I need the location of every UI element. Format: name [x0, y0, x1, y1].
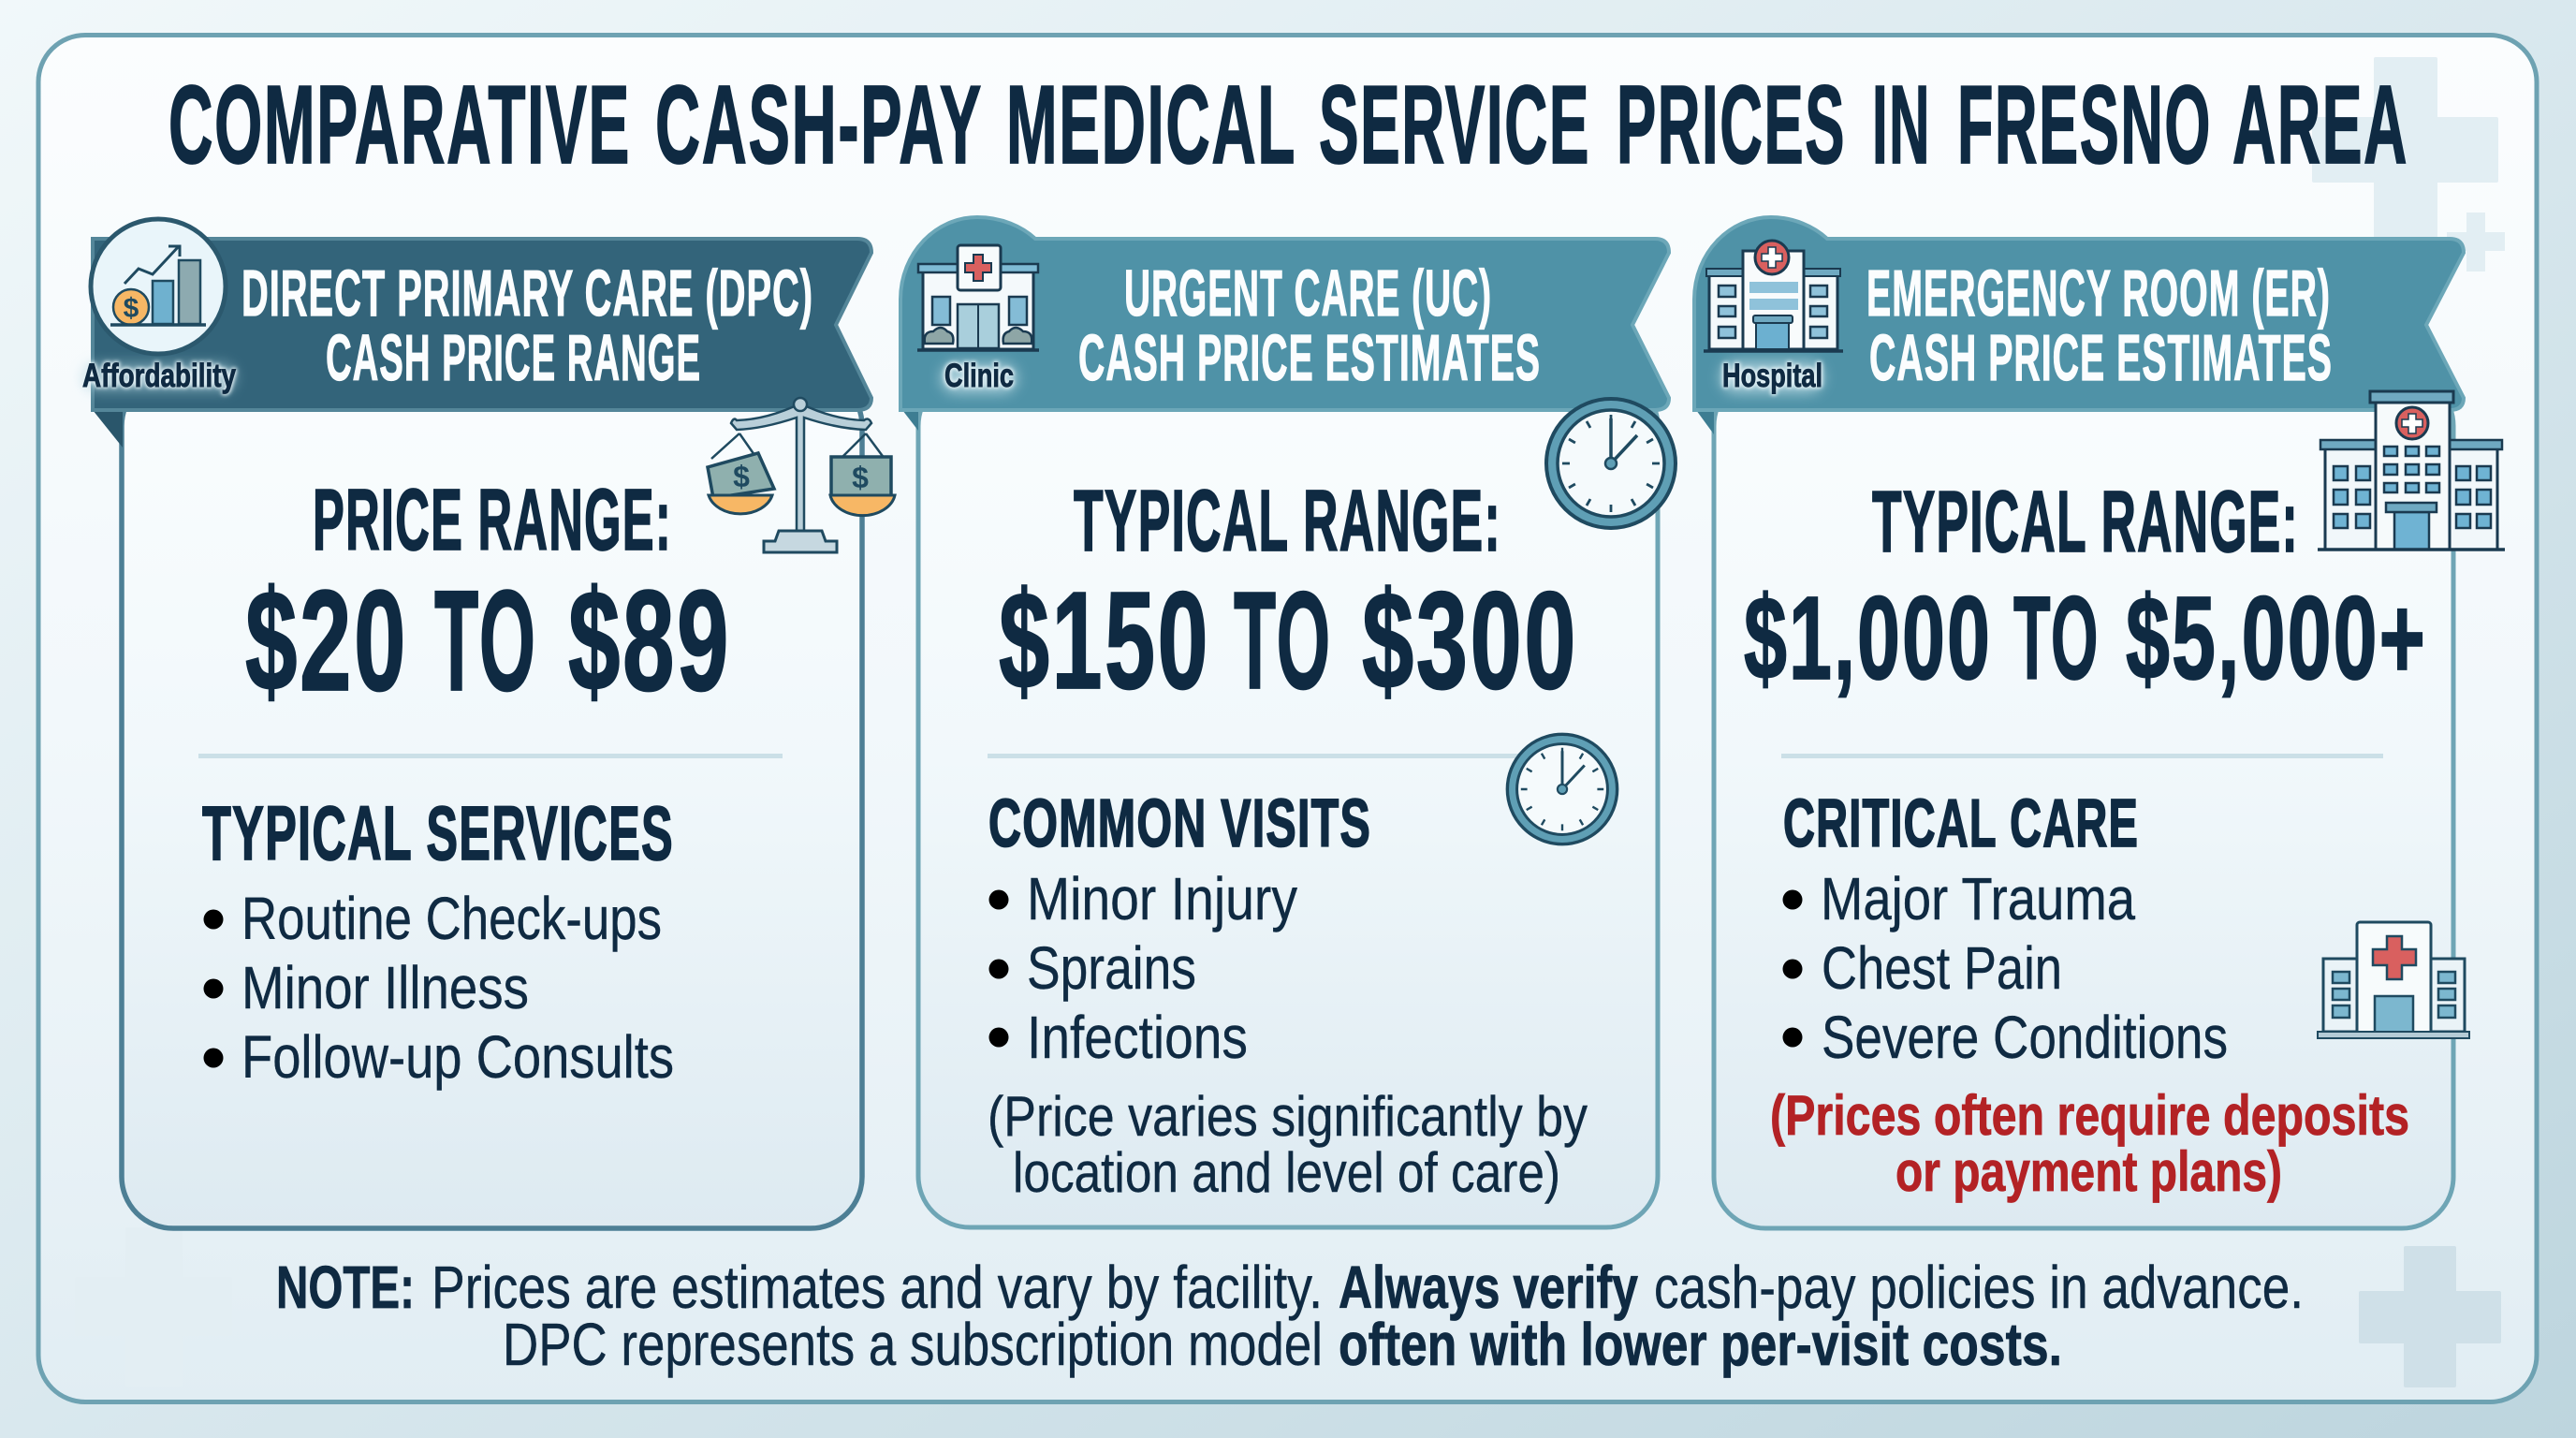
icon: balance scale with money: $: [733, 460, 750, 493]
title: [168, 63, 2408, 187]
services list: [204, 885, 674, 1091]
banner heading: [1078, 257, 1541, 394]
banner heading: URGENT CARE (UC): [1124, 257, 1492, 330]
icon: balance scale with money: [708, 398, 895, 552]
price value: TO: [434, 561, 537, 721]
title: PRICES: [1617, 63, 1846, 187]
price value: $300: [1362, 564, 1578, 718]
red warning note: [1770, 1084, 2409, 1203]
footnote: NOTE:: [276, 1254, 415, 1321]
range label: TYPICAL RANGE:: [1074, 472, 1501, 569]
ribbon fold: [902, 410, 918, 431]
label glow: [1720, 361, 1823, 393]
price note: location and level of care): [1013, 1141, 1560, 1204]
banner heading: CASH PRICE ESTIMATES: [1078, 321, 1541, 394]
banner heading: DIRECT PRIMARY CARE (DPC): [242, 257, 813, 330]
icon: large hospital: [2318, 391, 2505, 550]
panel: urgent care: [900, 217, 1676, 1227]
decorative cross: top right large: [2314, 59, 2496, 236]
card body: [1714, 374, 2453, 1228]
icon label: hospital: Hospital: [1722, 358, 1822, 394]
price value: TO: [1234, 564, 1332, 718]
visits list: Sprains: [1027, 934, 1196, 1002]
price value: [999, 564, 1578, 718]
footnote: Prices are estimates and vary by facility.: [432, 1254, 1323, 1321]
ribbon fold: [93, 410, 123, 448]
price value: [245, 561, 731, 721]
visits list: [988, 865, 1297, 1071]
footnote: [276, 1254, 2304, 1378]
price note: [988, 1085, 1588, 1204]
footnote: often with lower per-visit costs.: [1339, 1311, 2062, 1378]
services heading: TYPICAL SERVICES: [202, 791, 674, 876]
banner heading: [1866, 257, 2333, 394]
icon: large clock: [1546, 399, 1676, 528]
red warning note: or payment plans): [1895, 1140, 2282, 1203]
title: SERVICE: [1319, 63, 1590, 187]
banner heading: [242, 257, 813, 394]
footnote: Always verify: [1339, 1254, 1638, 1321]
footnote: DPC represents a subscription model: [503, 1311, 1323, 1378]
critical care list: Chest Pain: [1822, 934, 2062, 1002]
footnote: cash-pay policies in advance.: [1654, 1254, 2304, 1321]
critical care list: Severe Conditions: [1822, 1004, 2228, 1071]
ribbon fold: [1696, 410, 1714, 434]
visits heading: COMMON VISITS: [988, 786, 1371, 861]
critical care list: Major Trauma: [1821, 865, 2135, 932]
label glow: [941, 363, 1017, 393]
decorative cross: bottom left: [77, 1229, 230, 1385]
icon: affordability chart: $: [124, 293, 139, 324]
ribbon banner: [1694, 217, 2464, 410]
title: AREA: [2232, 63, 2408, 187]
visits list: Minor Injury: [1027, 865, 1297, 932]
decorative cross: bottom right: [2361, 1248, 2499, 1386]
panel: emergency room: [1694, 217, 2505, 1228]
icon label: affordability: Affordability: [82, 358, 236, 394]
services list: Follow-up Consults: [242, 1023, 674, 1091]
services list: Routine Check-ups: [242, 885, 662, 952]
ribbon banner: [93, 239, 871, 410]
title: FRESNO: [1957, 63, 2212, 187]
title: CASH-PAY: [655, 63, 983, 187]
label glow: [82, 363, 236, 391]
icon: small clock: [1507, 734, 1617, 844]
price value: $150: [999, 564, 1210, 718]
title: COMPARATIVE: [168, 63, 631, 187]
icon: hospital in banner: [1704, 241, 1843, 351]
critical care list: [1782, 865, 2228, 1071]
price value: TO: [2013, 572, 2100, 704]
price value: $20: [245, 561, 408, 721]
price label: PRICE RANGE:: [313, 471, 672, 568]
icon: affordability chart: [91, 219, 226, 354]
panel: direct primary care: [82, 219, 895, 1228]
price note: (Price varies significantly by: [988, 1085, 1588, 1148]
critical care heading: CRITICAL CARE: [1783, 786, 2139, 861]
price value: [1744, 572, 2427, 704]
price value: $89: [568, 561, 731, 721]
red warning note: (Prices often require deposits: [1770, 1084, 2409, 1147]
title: MEDICAL: [1006, 63, 1296, 187]
banner heading: CASH PRICE RANGE: [326, 321, 701, 394]
icon: small hospital: [2318, 922, 2469, 1038]
price value: $1,000: [1744, 572, 1992, 704]
visits list: Infections: [1027, 1004, 1248, 1071]
price value: $5,000+: [2126, 572, 2427, 704]
icon: clinic: [917, 245, 1039, 350]
icon: balance scale with money: $: [852, 461, 869, 494]
decorative cross: top right small: [2447, 213, 2505, 271]
icon label: clinic: Clinic: [944, 358, 1014, 394]
card body: [122, 374, 862, 1228]
ribbon banner: [900, 217, 1669, 410]
card body: [918, 374, 1658, 1227]
services list: Minor Illness: [242, 954, 529, 1021]
title: IN: [1872, 63, 1931, 187]
